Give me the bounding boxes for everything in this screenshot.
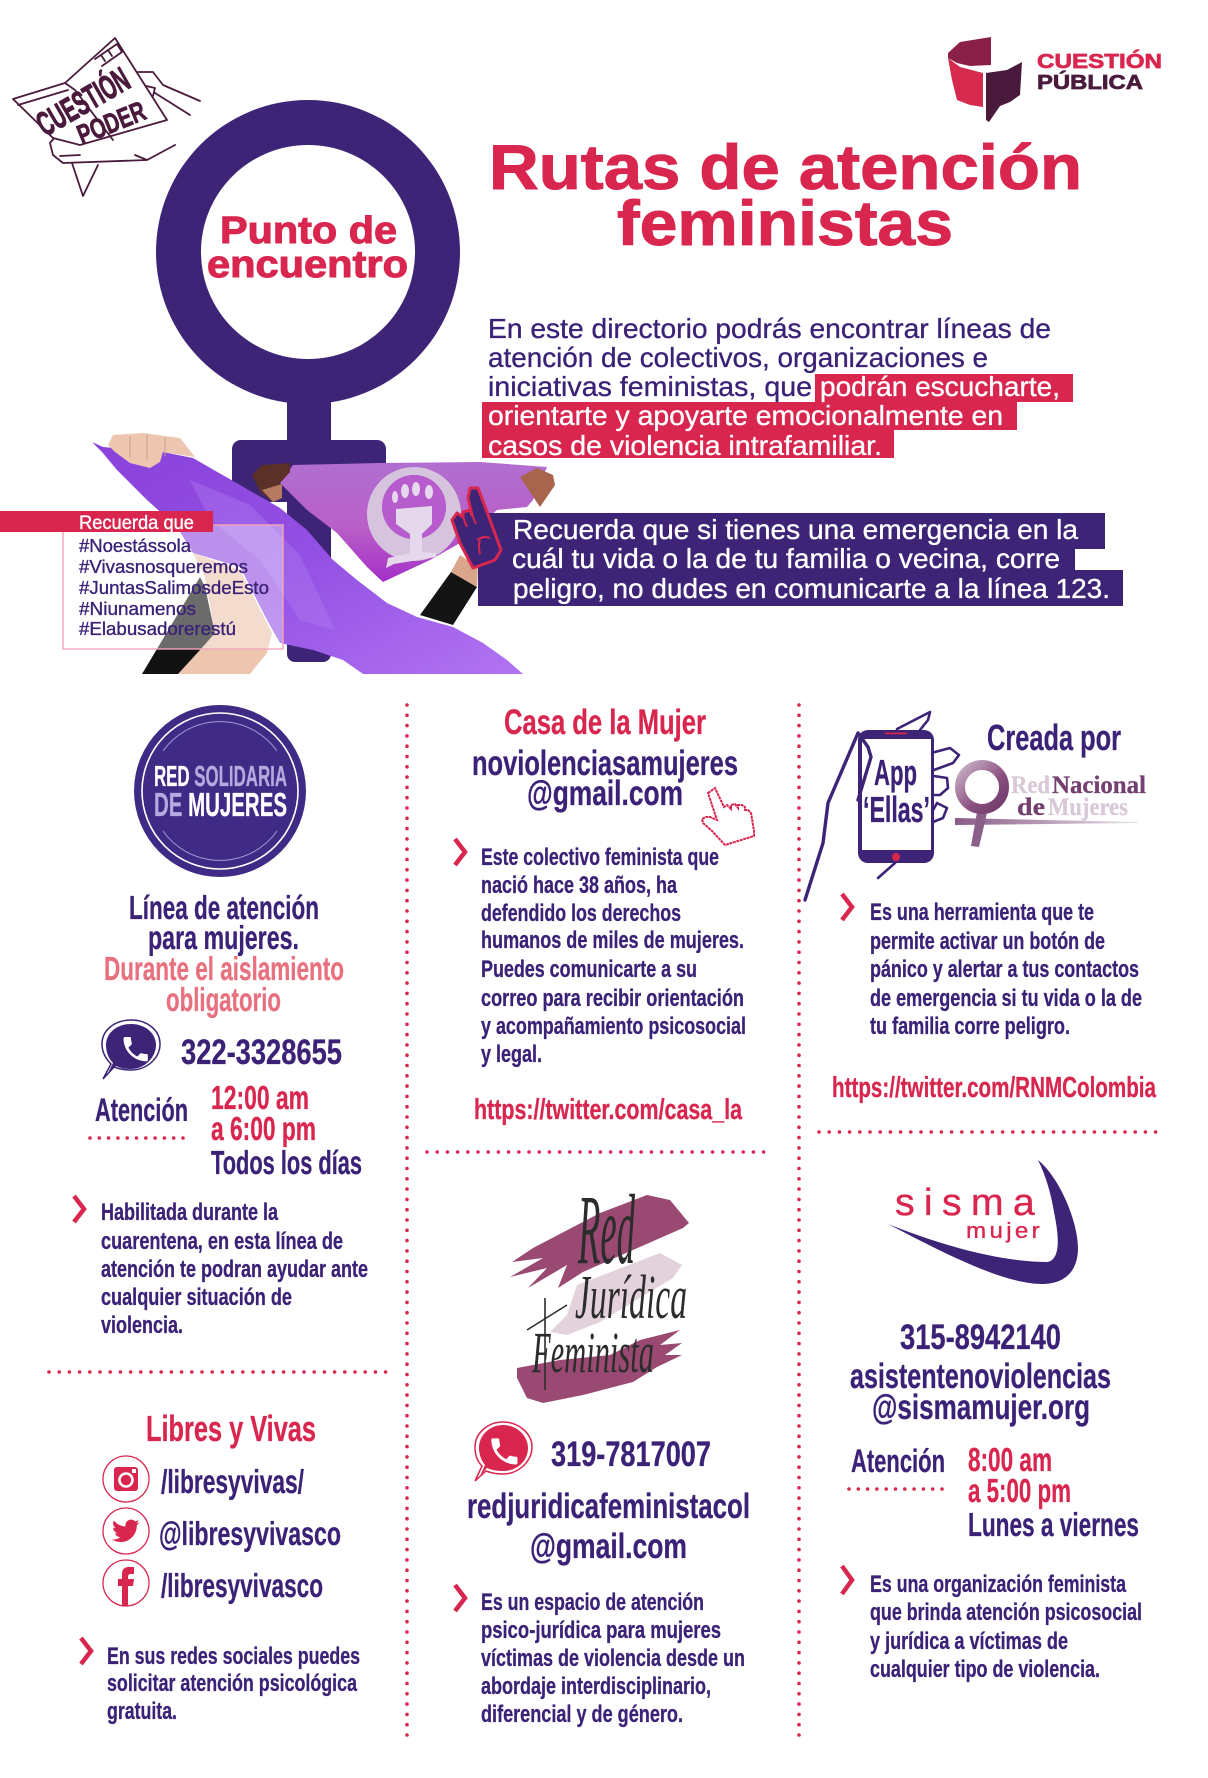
icon: hand holding phone: App [874,752,917,793]
icon: Facebook [103,1560,149,1606]
schedule: 12:00 am [211,1079,309,1116]
callout: emergency line 123: peligro, no dudes en comunicarte a la línea 123. [513,573,1110,604]
email: redjuridicafeministacol [467,1487,750,1526]
logo: Red Nacional de Mujeres: Mujeres [1048,794,1128,821]
panel: Sisma Mujer [842,1160,1142,1683]
description: solicitar atención psicológica [107,1670,357,1697]
title [489,133,1082,259]
callout: emergency line 123: cuál tu vida o la de tu familia o vecina, corre [512,543,1060,574]
description: y jurídica a víctimas de [870,1628,1068,1655]
description: cuarentena, en esta línea de [101,1228,343,1255]
email: noviolenciasamujeres [472,744,738,783]
schedule: a 5:00 pm [968,1472,1071,1509]
description: tu familia corre peligro. [870,1013,1070,1040]
callout: Recuerda que hashtags: #Niunamenos [79,599,196,619]
email [467,1487,750,1566]
phone number: 319-7817007 [551,1435,711,1474]
description: cualquier tipo de violencia. [870,1656,1100,1683]
heading: Libres y Vivas: Libres y Vivas [146,1408,316,1449]
logo: Red Nacional de Mujeres: Nacional [1052,772,1146,799]
logo: Red Nacional de Mujeres: Red [1011,772,1050,799]
email: @gmail.com [530,1527,687,1566]
description: Es una organización feminista [870,1571,1126,1598]
callout: Recuerda que hashtags: Recuerda que [79,513,194,534]
panel: Red Solidaria de Mujeres [74,705,368,1339]
social handles: /libresyvivas/ [161,1463,304,1500]
logo: Red Nacional de Mujeres [955,765,1146,847]
heading: línea de atención: obligatorio [166,981,281,1018]
logo: Red Jurídica Feminista: Feminista [531,1320,654,1385]
schedule: 8:00 am [968,1441,1052,1478]
callout: Recuerda que hashtags: #JuntasSalimosdeEsto [79,578,269,598]
phone number: 322-3328655 [181,1033,342,1072]
icon: WhatsApp red [475,1422,532,1481]
logo: Red Nacional de Mujeres: de [1017,794,1045,821]
social handles: /libresyvivasco [161,1567,323,1604]
description: y legal. [481,1041,542,1068]
heading: línea de atención [104,889,344,1018]
logo: Sisma Mujer [888,1160,1078,1284]
callout: emergency line 123: Recuerda que si tienes una emergencia en la [513,514,1078,545]
callout: Recuerda que hashtags: #Noestássola [79,536,192,556]
icon: raised finger hand [452,488,501,568]
heading: Casa de la Mujer: Casa de la Mujer [504,703,706,742]
description: atención te podran ayudar ante [101,1256,368,1283]
callout: Recuerda que hashtags [0,511,283,649]
description: abordaje interdisciplinario, [481,1673,711,1700]
icon: pointer hand [702,788,754,845]
title: Rutas de atención [489,133,1082,203]
description: humanos de miles de mujeres. [481,927,744,954]
logo: Cuestión Pública: PÚBLICA [1037,70,1143,94]
description: Puedes comunicarte a su [481,956,697,983]
schedule: a 6:00 pm [211,1110,316,1147]
description [455,1585,745,1728]
description: cualquier situación de [101,1284,292,1311]
heading: Punto de encuentro: encuentro [207,244,408,286]
phone and email [850,1318,1111,1427]
description [842,1566,1142,1683]
description [455,839,746,1068]
email [472,744,738,813]
callout: Recuerda que hashtags: #Vivasnosqueremos [79,557,248,577]
logo: Sisma Mujer: sisma [895,1182,1044,1224]
icon: Cuestión Poder newspaper logo: PODER [73,95,150,151]
phone and email: 315-8942140 [900,1318,1061,1357]
description: Es una herramienta que te [870,899,1094,926]
dotted column dividers [49,705,1160,1738]
description [842,894,1142,1040]
schedule [849,1441,1139,1543]
heading: línea de atención: para mujeres. [148,919,299,956]
heading: línea de atención: Durante el aislamiento [104,950,344,987]
text block: introduction: atención de colectivos, organizaciones e [488,342,988,373]
schedule: Todos los días [211,1144,362,1181]
description: psico-jurídica para mujeres [481,1617,721,1644]
description: Habilitada durante la [101,1199,278,1226]
description: permite activar un botón de [870,928,1105,955]
text block: introduction: podrán escucharte, [820,371,1060,402]
phone and email: asistentenoviolencias [850,1357,1111,1396]
icon: WhatsApp [102,1020,160,1079]
description [74,1196,368,1339]
heading: Punto de encuentro: Punto de [220,210,397,252]
photo illustration: raised hands with purple scarves [92,433,555,674]
description: Es un espacio de atención [481,1589,704,1616]
text block: introduction: casos de violencia intrafamiliar. [488,430,882,461]
heading: Creada por: Creada por [987,717,1121,758]
icon: Twitter [103,1508,149,1554]
icon: Venus symbol [156,100,460,662]
logo: Red Jurídica Feminista: Red [578,1174,635,1285]
logo: Red Jurídica Feminista [510,1174,689,1403]
icon: Instagram [103,1456,149,1502]
text block: introduction [482,313,1073,461]
logo: Red Solidaria de Mujeres badge: DE MUJERES [154,786,287,823]
callout: emergency line 123 [478,513,1123,606]
callout: Recuerda que hashtags: #Elabusadorerestú [79,619,236,639]
schedule: Atención [95,1092,188,1128]
description: víctimas de violencia desde un [481,1645,745,1672]
phone and email: @sismamujer.org [872,1388,1090,1427]
heading: Punto de encuentro [207,210,408,286]
description: correo para recibir orientación [481,985,744,1012]
schedule: Atención [851,1443,945,1479]
heading: línea de atención: Línea de atención [129,889,319,926]
icon: hand holding phone: ‘Ellas’ [863,789,930,830]
icon: Cuestión Poder newspaper logo: CUESTIÓN [30,61,136,144]
text block: introduction: iniciativas feministas, que [488,371,812,402]
logo: Red Solidaria de Mujeres badge: RED SOLIDARIA [154,761,287,793]
description: violencia. [101,1312,183,1339]
description: nació hace 38 años, ha [481,872,677,899]
text block: introduction: orientarte y apoyarte emocionalmente en [488,400,1003,431]
description: En sus redes sociales puedes [107,1643,360,1670]
text block: introduction: En este directorio podrás encontrar líneas de [488,313,1051,344]
title: feministas [617,189,953,259]
link: https://twitter.com/casa_la [474,1094,743,1126]
schedule [90,1079,362,1181]
icon: Cuestión Poder newspaper logo [13,38,200,196]
logo: Red Jurídica Feminista: Jurídica [575,1264,687,1332]
description: diferencial y de género. [481,1701,683,1728]
logo: Cuestión Pública: CUESTIÓN [1037,49,1162,73]
description [81,1638,360,1725]
logo: Cuestión Pública [948,37,1162,122]
panel: Libres y Vivas [81,1408,360,1725]
logo: Red Solidaria de Mujeres badge [134,705,306,877]
icon: hand holding phone [805,712,959,900]
social handles: @libresyvivasco [159,1515,341,1552]
description: y acompañamiento psicosocial [481,1013,746,1040]
description: defendido los derechos [481,900,681,927]
logo: Sisma Mujer: mujer [966,1218,1043,1243]
panel: App Ellas [805,712,1157,1104]
panel: Red Jurídica Feminista [455,1174,750,1728]
social handles [159,1463,341,1604]
description: gratuita. [107,1698,177,1725]
email: @gmail.com [527,774,683,813]
description: Este colectivo feminista que [481,844,719,871]
panel: Casa de la Mujer [455,703,754,1126]
